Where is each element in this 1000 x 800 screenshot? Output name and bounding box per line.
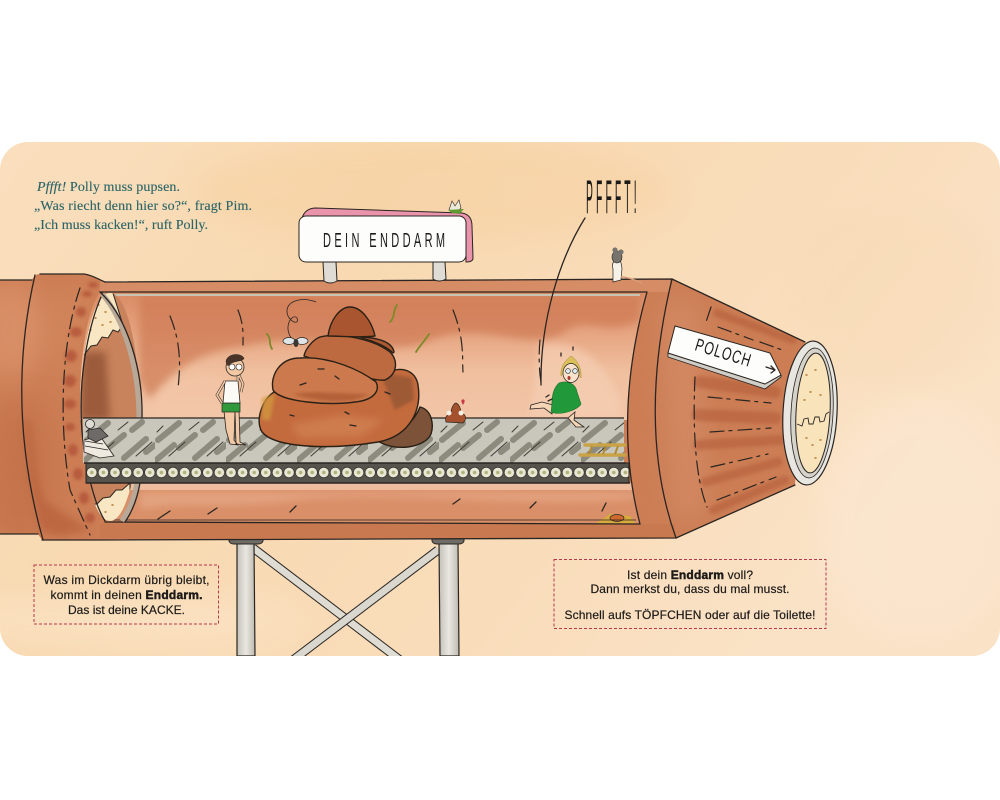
story text: Pffft! Polly muss pupsen. [36, 180, 180, 195]
left leg [237, 542, 255, 656]
character: Polly [530, 347, 584, 427]
cone stitches [694, 307, 785, 507]
story text: „Was riecht denn hier so?“, fragt Pim. [34, 199, 252, 214]
big poop [259, 307, 432, 447]
collar beads [64, 282, 98, 523]
story text: „Ich muss kacken!“, ruft Polly. [34, 218, 208, 233]
right leg [439, 542, 459, 656]
end opening ring [779, 340, 841, 486]
callout: left info box: Das ist deine KACKE. [68, 603, 185, 617]
dark lump [378, 407, 432, 447]
white face [299, 216, 466, 262]
cream end wall [84, 293, 123, 356]
tube outline [0, 279, 805, 540]
base layer [259, 370, 419, 447]
conveyor belt [83, 418, 630, 483]
exclamation PFFFT [541, 172, 637, 385]
pile of paper and mouse on belt [84, 420, 114, 458]
tube body [0, 274, 805, 540]
sign posts [323, 262, 446, 283]
exclamation PFFFT: PFFFT! [586, 172, 637, 224]
top lump [328, 307, 375, 337]
callout: right info box: Ist dein Enddarm voll? [627, 568, 753, 582]
sign: Dein Enddarm [299, 200, 473, 283]
ladder [580, 445, 625, 455]
second layer [272, 358, 377, 404]
pink top [302, 208, 473, 262]
support legs [229, 537, 464, 660]
leg caps [228, 539, 464, 544]
callout: left info box [34, 565, 218, 624]
character: Pim [217, 355, 246, 445]
callout: left info box: kommt in deinen Enddarm. [50, 588, 202, 602]
window into the tube [78, 290, 653, 526]
cone seam [655, 279, 676, 538]
callout: left info box: Was im Dickdarm übrig bleibt, [44, 573, 210, 587]
sign: Poloch [668, 326, 781, 389]
callout: right info box: Dann merkst du, dass du mal musst. [590, 582, 790, 596]
small poop with heart [446, 400, 466, 423]
poop specks [290, 369, 390, 426]
speech line [541, 218, 585, 385]
small butterfly on sign [448, 200, 464, 214]
small side lump [358, 337, 394, 353]
chain of beads [86, 463, 629, 483]
intestine tube [0, 274, 841, 540]
view through tube opening [78, 290, 143, 525]
fly [283, 300, 316, 347]
sign: Poloch: POLOCH [693, 335, 753, 371]
collar stitches [63, 288, 90, 535]
stink lines [267, 305, 429, 352]
cross braces [253, 548, 438, 660]
mouse on the tube [612, 247, 642, 283]
callout: right info box: Schnell aufs TÖPFCHEN oder auf die Toilette! [564, 608, 816, 622]
background panel [0, 140, 1000, 660]
callout: right info box [554, 560, 826, 628]
muscle stripes on cone [698, 313, 793, 510]
sign: Dein Enddarm: DEIN ENDDARM [323, 230, 445, 252]
story text [34, 180, 252, 233]
collar outline [22, 274, 105, 540]
third layer [304, 335, 395, 380]
